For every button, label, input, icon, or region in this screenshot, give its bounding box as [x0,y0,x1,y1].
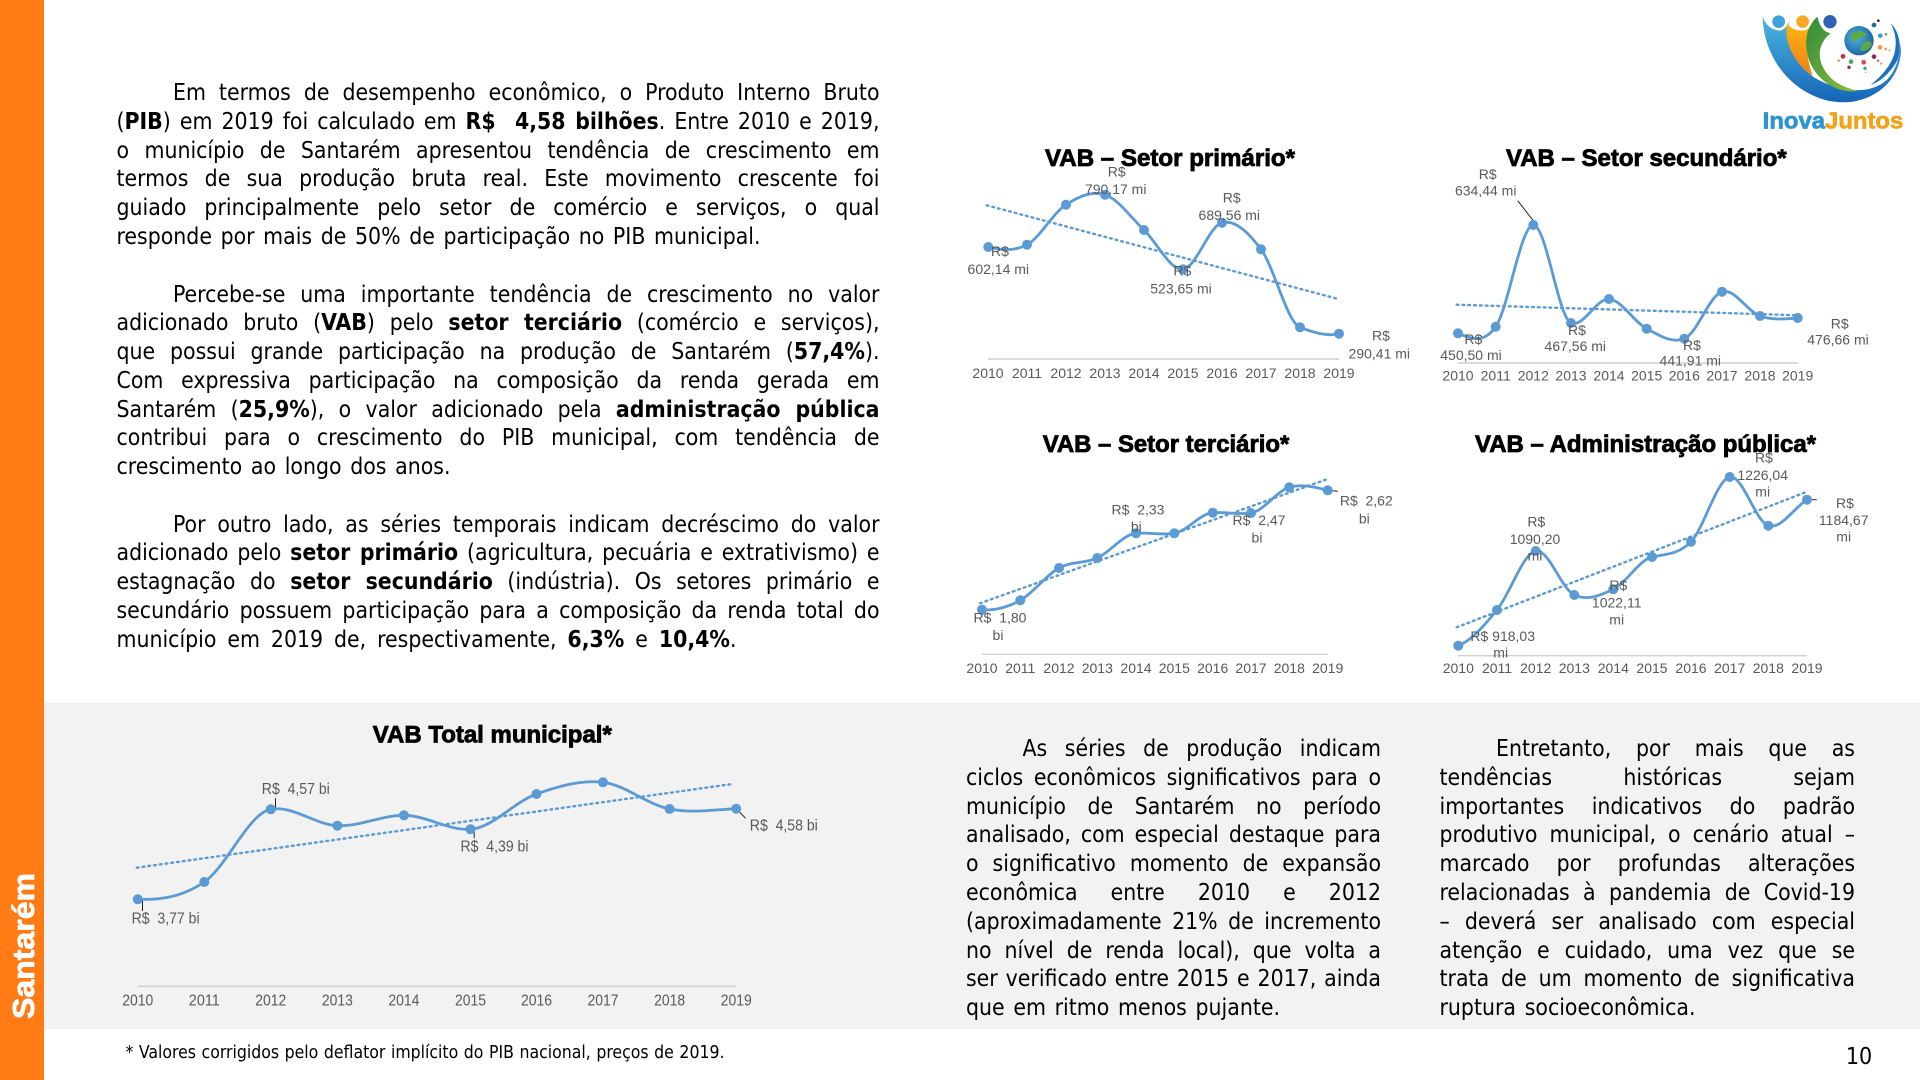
chart: VAB total municipal: 2013 [322,993,353,1010]
text block: production cycles column: o significativo momento de expansão [966,851,1381,877]
chart: VAB administração pública: 2011 [1482,660,1512,676]
chart: VAB setor terciário: 2010 [966,660,998,676]
chart: VAB setor primário: 2012 [1050,365,1082,381]
chart: VAB administração pública: mi [1493,645,1508,661]
panel: grey lower band [44,703,1920,1029]
chart: VAB setor terciário: 2019 [1312,660,1343,676]
text block: paragraph 3: Por outro lado, as séries temporais indicam decréscimo do valor [173,512,880,538]
chart: VAB setor primário: R$ [1223,189,1241,205]
chart: VAB setor primário: R$ [1173,263,1191,279]
chart: VAB administração pública: 2015 [1636,660,1668,676]
chart: VAB administração pública: R$ 918,03 [1470,628,1535,644]
text block: paragraph 1: guiado principalmente pelo setor de comércio e serviços, o qual [116,195,880,221]
chart: VAB total municipal: 2017 [588,993,619,1010]
text block: covid column: importantes indicativos do padrão [1440,794,1855,820]
chart: VAB administração pública: 1022,11 [1592,595,1642,611]
chart: VAB setor secundário: 2016 [1669,368,1700,384]
chart: VAB total municipal: 2015 [455,993,486,1010]
text block: paragraph 2: Percebe-se uma importante tendência de crescimento no valor [173,282,880,308]
text block: production cycles column: município de Santarém no período [966,794,1381,820]
text block: covid column: marcado por profundas alterações [1440,851,1855,877]
text block: paragraph 2: adicionado bruto (VAB) pelo setor terciário (comércio e serviços), [116,310,880,336]
text block: covid column: – deverá ser analisado com especial [1440,909,1855,935]
chart: VAB total municipal: 2018 [654,993,685,1010]
chart title: setor terciário: VAB – Setor terciário* [1043,431,1290,458]
chart: VAB administração pública: R$ [1527,514,1545,530]
chart: VAB setor terciário: bi [1131,519,1142,535]
text block: paragraph 2: contribui para o crescimento do PIB municipal, com tendência de [116,425,880,451]
chart: VAB setor secundário: 2019 [1782,368,1813,384]
chart: VAB setor terciário: bi [993,627,1003,643]
chart: VAB setor terciário: 2017 [1235,660,1267,676]
chart: VAB setor secundário: 2018 [1744,368,1776,384]
chart: VAB setor terciário: R$ 1,80 [974,609,1027,625]
text block: production cycles column: que em ritmo menos pujante. [966,995,1280,1021]
chart: VAB setor terciário: 2015 [1159,660,1190,676]
chart: VAB setor primário: 2017 [1245,365,1277,381]
chart: VAB setor terciário: bi [1252,529,1262,545]
chart: VAB administração pública: mi [1836,529,1851,545]
chart: VAB administração pública: 2016 [1675,660,1707,676]
chart: VAB total municipal: 2011 [189,993,220,1010]
text block: paragraph 2: crescimento ao longo dos anos. [116,454,450,480]
chart: VAB setor secundário: 2013 [1555,368,1587,384]
chart: VAB total municipal: 2019 [721,993,752,1010]
icon: InovaJuntos logo: InovaJuntos [1763,107,1903,133]
text block: paragraph 1: (PIB) em 2019 foi calculado em R$ 4,58 bilhões. Entre 2010 e 2019, [116,109,880,135]
chart: VAB total municipal: R$ 4,58 bi [750,818,818,835]
chart: VAB administração pública: R$ [1755,450,1773,466]
text block: production cycles column: ser verificado entre 2015 e 2017, ainda [966,966,1381,992]
chart title: administração pública: VAB – Administração pública* [1475,431,1817,458]
icon: InovaJuntos logo [1763,15,1903,133]
chart: VAB setor primário: 2015 [1167,365,1199,381]
chart: VAB setor terciário: 2018 [1274,660,1305,676]
chart: VAB administração pública: mi [1609,611,1624,627]
chart: VAB setor primário: 2016 [1206,365,1238,381]
text block: covid column: ruptura socioeconômica. [1440,995,1696,1021]
chart: VAB setor secundário: 2014 [1593,368,1625,384]
chart: VAB setor primário: R$ [1108,164,1126,180]
chart: VAB setor terciário: 2016 [1197,660,1228,676]
chart: VAB setor secundário: R$ [1479,166,1497,182]
chart: VAB setor primário: 523,65 mi [1150,280,1212,296]
chart: VAB administração pública: 2013 [1559,660,1590,676]
text block: production cycles column: As séries de produção indicam [1022,736,1381,762]
chart: VAB administração pública: R$ [1609,577,1627,593]
chart: VAB administração pública: 2010 [1443,660,1474,676]
chart: VAB setor primário [968,145,1410,381]
chart: VAB setor terciário: 2013 [1082,660,1113,676]
chart: VAB setor primário: 2019 [1323,365,1355,381]
chart: VAB setor secundário: 467,56 mi [1545,338,1606,354]
text block: production cycles column [966,736,1381,1021]
chart: VAB setor primário: 689,56 mi [1199,207,1260,223]
text block: covid column: tendências históricas sejam [1440,765,1855,791]
chart: VAB setor primário: 790,17 mi [1085,181,1146,197]
chart: VAB administração pública: 2018 [1753,660,1784,676]
chart: VAB setor terciário: 2012 [1043,660,1075,676]
chart: VAB setor secundário: 2017 [1706,368,1738,384]
chart: VAB total municipal [122,722,818,1010]
chart: VAB setor terciário: R$ 2,62 [1340,493,1393,509]
chart: VAB setor primário: R$ [1372,328,1390,344]
text block: paragraph 1 [116,80,880,250]
text block: paragraph 1: termos de sua produção bruta real. Este movimento crescente foi [116,166,880,192]
chart title: setor primário: VAB – Setor primário* [1045,145,1296,172]
chart: VAB setor secundário: 2010 [1442,368,1474,384]
text block: production cycles column: no nível de renda local), que volta a [966,938,1381,964]
text block: covid column: trata de um momento de significativa [1440,966,1855,992]
chart title: total municipal: VAB Total municipal* [373,722,612,749]
chart: VAB administração pública: R$ [1836,495,1854,511]
chart: VAB setor primário: 2011 [1012,365,1042,381]
sidebar label: Santarém: Santarém [6,873,41,1019]
chart: VAB setor secundário: 450,50 mi [1440,347,1502,363]
page number: 10 [1846,1044,1872,1070]
text block: production cycles column: (aproximadamente 21% de incremento [966,909,1381,935]
text block: covid column: relacionadas à pandemia de Covid-19 [1440,880,1855,906]
chart: VAB administração pública: 2019 [1791,660,1823,676]
chart: VAB setor terciário: 2014 [1120,660,1152,676]
chart: VAB setor secundário: 634,44 mi [1455,183,1516,199]
chart: VAB setor primário: 2013 [1089,365,1121,381]
text block: paragraph 3 [116,512,880,653]
text block: production cycles column: econômica entre 2010 e 2012 [966,880,1381,906]
chart: VAB setor primário: 2010 [972,365,1004,381]
chart: VAB setor primário: 2014 [1128,365,1160,381]
chart: VAB setor secundário: 2011 [1481,368,1511,384]
chart: VAB administração pública: 2014 [1598,660,1629,676]
text block: production cycles column: ciclos econômicos significativos para o [966,765,1381,791]
chart: VAB setor terciário: R$ 2,47 [1233,512,1286,528]
chart: VAB setor secundário: 2012 [1518,368,1549,384]
text block: covid column [1440,736,1855,1021]
text block: paragraph 2: Com expressiva participação na composição da renda gerada em [116,368,880,394]
chart: VAB administração pública: 1184,67 [1819,512,1869,528]
chart: VAB total municipal: 2016 [521,993,552,1010]
text block: production cycles column: analisado, com especial destaque para [966,822,1381,848]
chart: VAB administração pública [1443,431,1869,676]
text block: paragraph 3: município em 2019 de, respectivamente, 6,3% e 10,4%. [116,627,736,653]
text block: paragraph 2 [116,282,880,480]
text block: covid column: atenção e cuidado, uma vez que se [1440,938,1855,964]
chart: VAB administração pública: 2012 [1520,660,1551,676]
chart: VAB total municipal: 2010 [122,993,153,1010]
panel: orange sidebar [0,0,44,1080]
footnote: * Valores corrigidos pelo deflator implícito do PIB nacional, preços de 2019. [126,1043,724,1063]
chart: VAB setor secundário [1440,145,1869,384]
chart: VAB setor terciário: bi [1359,510,1370,526]
text block: covid column: Entretanto, por mais que as [1496,736,1855,762]
text block: paragraph 1: responde por mais de 50% de participação no PIB municipal. [116,224,760,250]
chart: VAB total municipal: 2012 [255,993,286,1010]
chart: VAB setor secundário: 476,66 mi [1807,332,1869,348]
chart: VAB setor primário: 2018 [1284,365,1316,381]
chart: VAB administração pública: 2017 [1714,660,1745,676]
text block: paragraph 1: Em termos de desempenho econômico, o Produto Interno Bruto [173,80,880,106]
chart: VAB total municipal: R$ 4,39 bi [460,838,528,855]
text block: paragraph 1: o município de Santarém apresentou tendência de crescimento em [116,138,880,164]
chart: VAB total municipal: R$ 4,57 bi [262,781,330,798]
text block: paragraph 2: que possui grande participação na produção de Santarém (57,4%). [116,339,880,365]
chart: VAB setor secundário: R$ [1568,322,1586,338]
chart title: setor secundário: VAB – Setor secundário* [1506,145,1787,172]
chart: VAB administração pública: mi [1755,484,1770,500]
text block: paragraph 3: estagnação do setor secundário (indústria). Os setores primário e [116,569,879,595]
chart: VAB administração pública: mi [1528,547,1542,563]
chart: VAB setor secundário: R$ [1464,331,1482,347]
chart: VAB setor terciário: R$ 2,33 [1112,501,1165,517]
text block: paragraph 2: Santarém (25,9%), o valor adicionado pela administração pública [116,397,880,423]
chart: VAB total municipal: 2014 [388,993,419,1010]
text block: paragraph 3: secundário possuem participação para a composição da renda total do [116,598,880,624]
text block: paragraph 3: adicionado pelo setor primário (agricultura, pecuária e extrativismo) e [116,540,880,566]
text block: covid column: produtivo municipal, o cenário atual – [1440,822,1855,848]
chart: VAB setor terciário [966,431,1393,676]
chart: VAB setor secundário: 2015 [1631,368,1662,384]
chart: VAB setor secundário: 441,91 mi [1660,353,1721,369]
chart: VAB setor secundário: R$ [1831,315,1849,331]
chart: VAB administração pública: 1090,20 [1510,531,1561,547]
chart: VAB total municipal: R$ 3,77 bi [132,910,200,927]
chart: VAB setor primário: 290,41 mi [1349,345,1410,361]
chart: VAB setor primário: 602,14 mi [968,261,1029,277]
chart: VAB setor terciário: 2011 [1005,660,1036,676]
chart: VAB administração pública: 1226,04 [1737,467,1788,483]
chart: VAB setor primário: R$ [991,243,1009,259]
chart: VAB setor secundário: R$ [1683,337,1701,353]
